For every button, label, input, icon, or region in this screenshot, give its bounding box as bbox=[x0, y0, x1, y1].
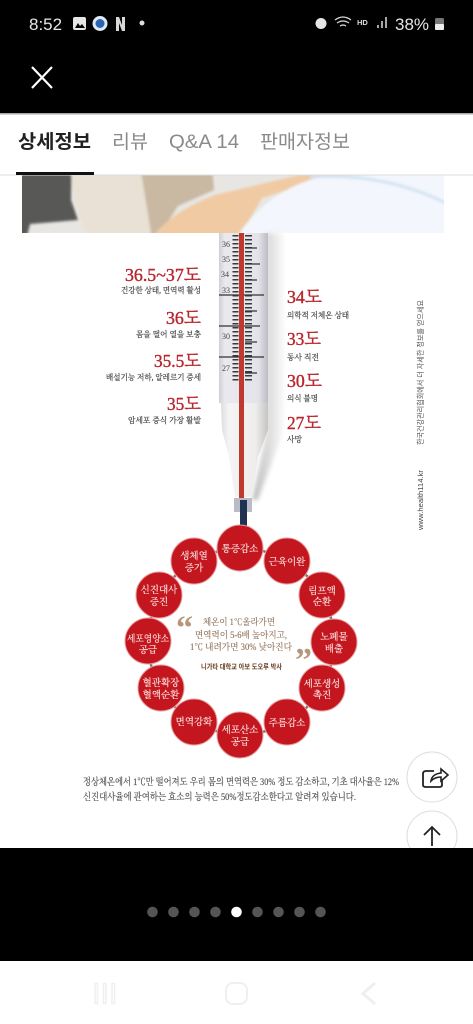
status bar right: alarm, wifi, signal, battery: HD bbox=[357, 18, 368, 27]
thermometer glass body bbox=[219, 233, 268, 497]
thermometer metal tip bbox=[234, 498, 252, 512]
node: waste excretion: 노폐물 bbox=[320, 631, 348, 643]
label 30 bbox=[287, 371, 322, 403]
label 33: 동사 직전 bbox=[287, 352, 319, 362]
scale numbers: 36 bbox=[222, 240, 230, 249]
node: cell oxygen supply bbox=[217, 712, 263, 758]
scale ticks bbox=[219, 235, 264, 382]
left temperature labels bbox=[106, 265, 201, 425]
status bar right: alarm, wifi, signal, battery: 38% bbox=[395, 15, 429, 34]
mercury column bbox=[239, 233, 244, 499]
node: cell oxygen supply: 세포산소 bbox=[222, 724, 258, 736]
node: immunity bbox=[171, 699, 217, 745]
node: metabolism: 신진대사 bbox=[141, 584, 178, 596]
label 27: 27도 bbox=[287, 413, 321, 433]
label 35.5 bbox=[106, 351, 201, 382]
label 30: 의식 불명 bbox=[287, 393, 318, 403]
attribution: 니가타 대학교 아보 도오루 박사 bbox=[201, 662, 282, 671]
node: vasodilation: 혈관확장 bbox=[143, 677, 180, 689]
center quote: 면역력이 5-6배 높아지고, bbox=[195, 629, 287, 640]
opening quote mark: “ bbox=[176, 610, 193, 647]
label 34: 34도 bbox=[287, 287, 322, 307]
label 36: 몸을 떨어 열을 보충 bbox=[136, 329, 201, 339]
label 35: 35도 bbox=[167, 394, 201, 414]
node: muscle relaxation: 근육이완 bbox=[269, 556, 306, 568]
tab: Q&A: Q&A 14 bbox=[169, 132, 239, 153]
node: body heat bbox=[171, 538, 217, 584]
scale numbers bbox=[221, 240, 230, 373]
tab: seller info: 판매자정보 bbox=[260, 131, 350, 153]
label 36 bbox=[136, 308, 201, 339]
scale numbers: 33 bbox=[222, 286, 230, 295]
node: muscle relaxation bbox=[264, 538, 310, 584]
scale numbers: 34 bbox=[221, 270, 229, 279]
vertical source text: 한국건강관리협회에서 더 자세한 정보를 얻으세요 bbox=[415, 300, 425, 445]
top black app bar bbox=[0, 0, 473, 113]
node: metabolism: 증진 bbox=[150, 596, 168, 608]
label 33: 33도 bbox=[287, 329, 321, 349]
bottom black pager panel bbox=[0, 848, 473, 961]
label 34: 의학적 저체온 상태 bbox=[287, 310, 349, 320]
node: cell nutrients: 세포영양소 bbox=[127, 633, 169, 645]
node: waste excretion: 배출 bbox=[325, 643, 343, 655]
label 35 bbox=[128, 394, 201, 425]
node: waste excretion bbox=[311, 619, 357, 665]
label 35.5: 35.5도 bbox=[154, 351, 201, 371]
tab bar bbox=[0, 113, 473, 176]
pager dots bbox=[147, 907, 326, 917]
node: cell nutrients: 공급 bbox=[139, 645, 157, 656]
node: vasodilation bbox=[138, 665, 184, 711]
node: wrinkle reduction bbox=[264, 699, 310, 745]
icon: recents bbox=[95, 984, 114, 1004]
label 35: 암세포 증식 가장 활발 bbox=[128, 415, 201, 425]
center quote: 1℃ 내려가면 30% 낮아진다 bbox=[190, 641, 292, 652]
benefits ring diagram bbox=[125, 525, 357, 758]
tab: selected detail info: 상세정보 bbox=[18, 131, 91, 153]
center quote: 체온이 1℃올라가면 bbox=[203, 616, 275, 627]
thermometer bbox=[219, 233, 286, 526]
node: wrinkle reduction: 주름감소 bbox=[269, 717, 305, 729]
label 27 bbox=[287, 413, 321, 444]
node: cell generation: 촉진 bbox=[313, 689, 331, 701]
share button bbox=[407, 752, 457, 802]
center quote bbox=[176, 610, 312, 679]
tab: reviews: 리뷰 bbox=[112, 131, 148, 153]
android navigation bar bbox=[95, 983, 375, 1004]
label 36: 36도 bbox=[166, 308, 201, 328]
scale numbers: 30 bbox=[222, 332, 230, 341]
label 34 bbox=[287, 287, 349, 320]
node: lymph circulation: 순환 bbox=[313, 596, 332, 608]
label 30: 30도 bbox=[287, 371, 322, 391]
selected tab underline bbox=[16, 172, 94, 175]
status bar right: alarm, wifi, signal, battery bbox=[316, 15, 444, 34]
status bar left: time and notification icons: 8:52 bbox=[29, 15, 62, 34]
scroll-to-top button bbox=[407, 811, 457, 861]
node: vasodilation: 혈액순환 bbox=[143, 689, 180, 701]
node: lymph circulation bbox=[299, 572, 345, 618]
photo: person with arm on pillow bbox=[22, 176, 444, 233]
node: body heat: 증가 bbox=[185, 562, 204, 574]
bottom paragraph: 신진대사율에 관여하는 효소의 능력은 50%정도감소한다고 알려져 있습니다. bbox=[83, 791, 356, 803]
icon: back bbox=[363, 983, 375, 1004]
label 36.5~37: 건강한 상태, 면역력 활성 bbox=[121, 285, 201, 295]
right temperature labels bbox=[287, 287, 349, 444]
node: pain relief bbox=[217, 525, 263, 571]
scale numbers: 27 bbox=[222, 364, 230, 373]
node: cell generation: 세포생성 bbox=[304, 678, 340, 690]
label 36.5~37: 36.5~37도 bbox=[125, 265, 201, 285]
label 35.5: 배설기능 저하, 알레르기 증세 bbox=[106, 372, 201, 382]
bottom paragraph: 정상체온에서 1℃만 떨어져도 우리 몸의 면역력은 30% 정도 감소하고, 기초 대사율은 12% bbox=[83, 776, 399, 788]
node: lymph circulation: 림프액 bbox=[308, 585, 336, 597]
label 33 bbox=[287, 329, 321, 362]
icon: home bbox=[226, 983, 247, 1004]
bottom paragraph bbox=[83, 776, 399, 803]
node: immunity: 면역강화 bbox=[176, 716, 213, 728]
icon: close X bbox=[32, 67, 52, 88]
vertical url: www.health114.kr bbox=[416, 470, 425, 531]
label 27: 사망 bbox=[287, 434, 302, 444]
node: metabolism bbox=[136, 572, 182, 618]
node: cell generation bbox=[299, 665, 345, 711]
closing quote mark: ” bbox=[295, 642, 312, 679]
node: body heat: 생체열 bbox=[180, 550, 208, 562]
scale numbers: 35 bbox=[222, 255, 230, 264]
thermometer shadow bbox=[252, 233, 286, 500]
label 36.5~37 bbox=[121, 265, 201, 295]
node: pain relief: 통증감소 bbox=[222, 543, 258, 555]
status bar left: time and notification icons bbox=[29, 15, 144, 34]
node: cell nutrients bbox=[125, 618, 171, 664]
node: cell oxygen supply: 공급 bbox=[231, 737, 249, 748]
